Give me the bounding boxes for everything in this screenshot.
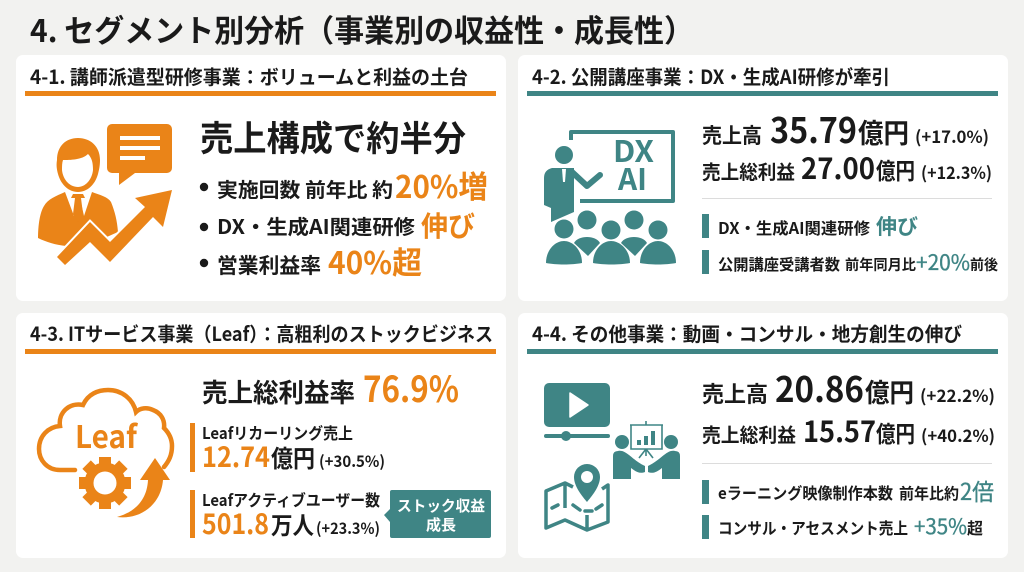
- metric: revenue 20.86: 億円: [865, 373, 914, 410]
- bullet: sessions up about 20%: [200, 162, 488, 207]
- metric: Leaf active users: [190, 487, 380, 543]
- callout: stock revenue growth: [384, 490, 491, 538]
- metric: gross profit 15.57: 15.57: [803, 409, 876, 451]
- icon: presenter at DX AI board with audience: [544, 127, 676, 264]
- title: 4. セグメント別分析（事業別の収益性・成長性）: [30, 6, 694, 51]
- metric: revenue 20.86: 売上高: [702, 377, 768, 409]
- metric: revenue 20.86: [702, 362, 995, 413]
- metric: Leaf active users: (+23.3%): [316, 517, 380, 539]
- heading: 4-2: 4-2. 公開講座事業：DX・生成AI研修が牽引: [532, 61, 890, 90]
- note: public course attendees: 前後: [970, 254, 998, 275]
- callout: stock revenue growth: 成長: [426, 514, 456, 535]
- note: consulting and assessment revenue: 超: [967, 515, 983, 539]
- panel: 4-4 other businesses: [518, 313, 1008, 558]
- note: DX and generative AI growth: 伸び: [876, 211, 918, 241]
- metric: revenue 35.79: 億円: [858, 112, 909, 151]
- note: public course attendees: 公開講座受講者数: [718, 253, 840, 275]
- panel: 4-1 instructor dispatch training: [16, 55, 506, 301]
- metric: gross profit 15.57: [702, 409, 995, 451]
- metric: gross profit 27.00: [702, 146, 992, 188]
- main statement: 売上構成で約半分: [200, 111, 466, 162]
- note: DX and generative AI growth: DX・生成AI関連研修: [718, 215, 870, 239]
- bullet: DX and generative AI training growing: 伸び: [421, 205, 475, 245]
- heading: 4-1: 4-1. 講師派遣型研修事業：ボリュームと利益の土台: [30, 61, 468, 90]
- bullet: sessions up about 20%: 実施回数 前年比 約: [217, 174, 393, 203]
- metric: gross margin 76.9%: 売上総利益率: [202, 373, 355, 410]
- bullet: operating margin over 40%: [200, 238, 422, 283]
- note: public course attendees: [702, 247, 998, 277]
- metric: revenue 35.79: (+17.0%): [915, 123, 989, 148]
- note: e-learning video production: 前年比約: [899, 482, 959, 504]
- icon: presenter at DX AI board with audience: DX: [613, 127, 654, 171]
- metric: Leaf active users: 501.8: [202, 503, 269, 543]
- metric: Leaf recurring revenue: (+30.5%): [319, 450, 385, 472]
- icon: presenter with speech bubble and rising arrow: [38, 124, 172, 265]
- bullet: DX and generative AI training growing: DX・生成AI関連研修: [217, 211, 415, 240]
- note: public course attendees: +20%: [916, 247, 970, 277]
- note: e-learning video production: eラーニング映像制作本数: [718, 480, 893, 504]
- heading: 4-3: 4-3. ITサービス事業（Leaf）：高粗利のストックビジネス: [30, 318, 493, 347]
- icon: Leaf cloud with gear and arrow: Leaf: [75, 412, 138, 457]
- note: consulting and assessment revenue: +35%: [914, 511, 967, 541]
- metric: gross profit 27.00: 売上総利益: [702, 156, 795, 185]
- metric: gross profit 15.57: 億円: [876, 415, 915, 449]
- metric: Leaf active users: 万人: [271, 506, 314, 541]
- metric: gross margin 76.9%: [202, 361, 459, 413]
- metric: Leaf recurring revenue: Leafリカーリング売上: [202, 420, 353, 444]
- note: e-learning video production: 2倍: [960, 473, 994, 507]
- bullet: sessions up about 20%: 20%増: [395, 162, 488, 207]
- metric: gross profit 15.57: (+40.2%): [921, 422, 995, 447]
- heading: 4-4: 4-4. その他事業：動画・コンサル・地方創生の伸び: [532, 318, 962, 347]
- bullet: operating margin over 40%: 40%超: [328, 238, 422, 283]
- icon: Leaf cloud with gear and arrow: [39, 390, 172, 517]
- metric: Leaf recurring revenue: 億円: [271, 439, 315, 474]
- note: consulting and assessment revenue: [702, 511, 983, 541]
- note: e-learning video production: [702, 473, 994, 507]
- metric: revenue 20.86: 20.86: [775, 362, 864, 413]
- metric: Leaf recurring revenue: [190, 420, 385, 476]
- icon: video, consulting and map: [544, 383, 680, 530]
- bullet: operating margin over 40%: 営業利益率: [217, 250, 321, 280]
- metric: gross profit 27.00: 27.00: [801, 146, 875, 188]
- metric: gross profit 27.00: 億円: [876, 152, 915, 186]
- bullet: DX and generative AI training growing: [200, 205, 475, 245]
- icon: presenter at DX AI board with audience: AI: [617, 155, 647, 199]
- note: DX and generative AI growth: [702, 211, 918, 241]
- note: public course attendees: 前年同月比: [845, 254, 916, 275]
- metric: revenue 20.86: (+22.2%): [920, 382, 995, 407]
- metric: revenue 35.79: [702, 103, 989, 154]
- panel: 4-2 public courses: [518, 55, 1008, 301]
- metric: Leaf recurring revenue: 12.74: [202, 436, 270, 476]
- callout: stock revenue growth: ストック収益: [397, 495, 485, 516]
- metric: gross profit 15.57: 売上総利益: [702, 419, 796, 448]
- metric: revenue 35.79: 35.79: [770, 103, 857, 154]
- metric: gross margin 76.9%: 76.9%: [363, 361, 459, 413]
- metric: gross profit 27.00: (+12.3%): [921, 159, 992, 184]
- metric: Leaf active users: Leafアクティブユーザー数: [202, 487, 380, 511]
- metric: revenue 35.79: 売上高: [702, 120, 762, 150]
- panel: 4-3 IT services Leaf: [16, 313, 506, 558]
- note: consulting and assessment revenue: コンサル・アセスメント売上: [718, 515, 908, 539]
